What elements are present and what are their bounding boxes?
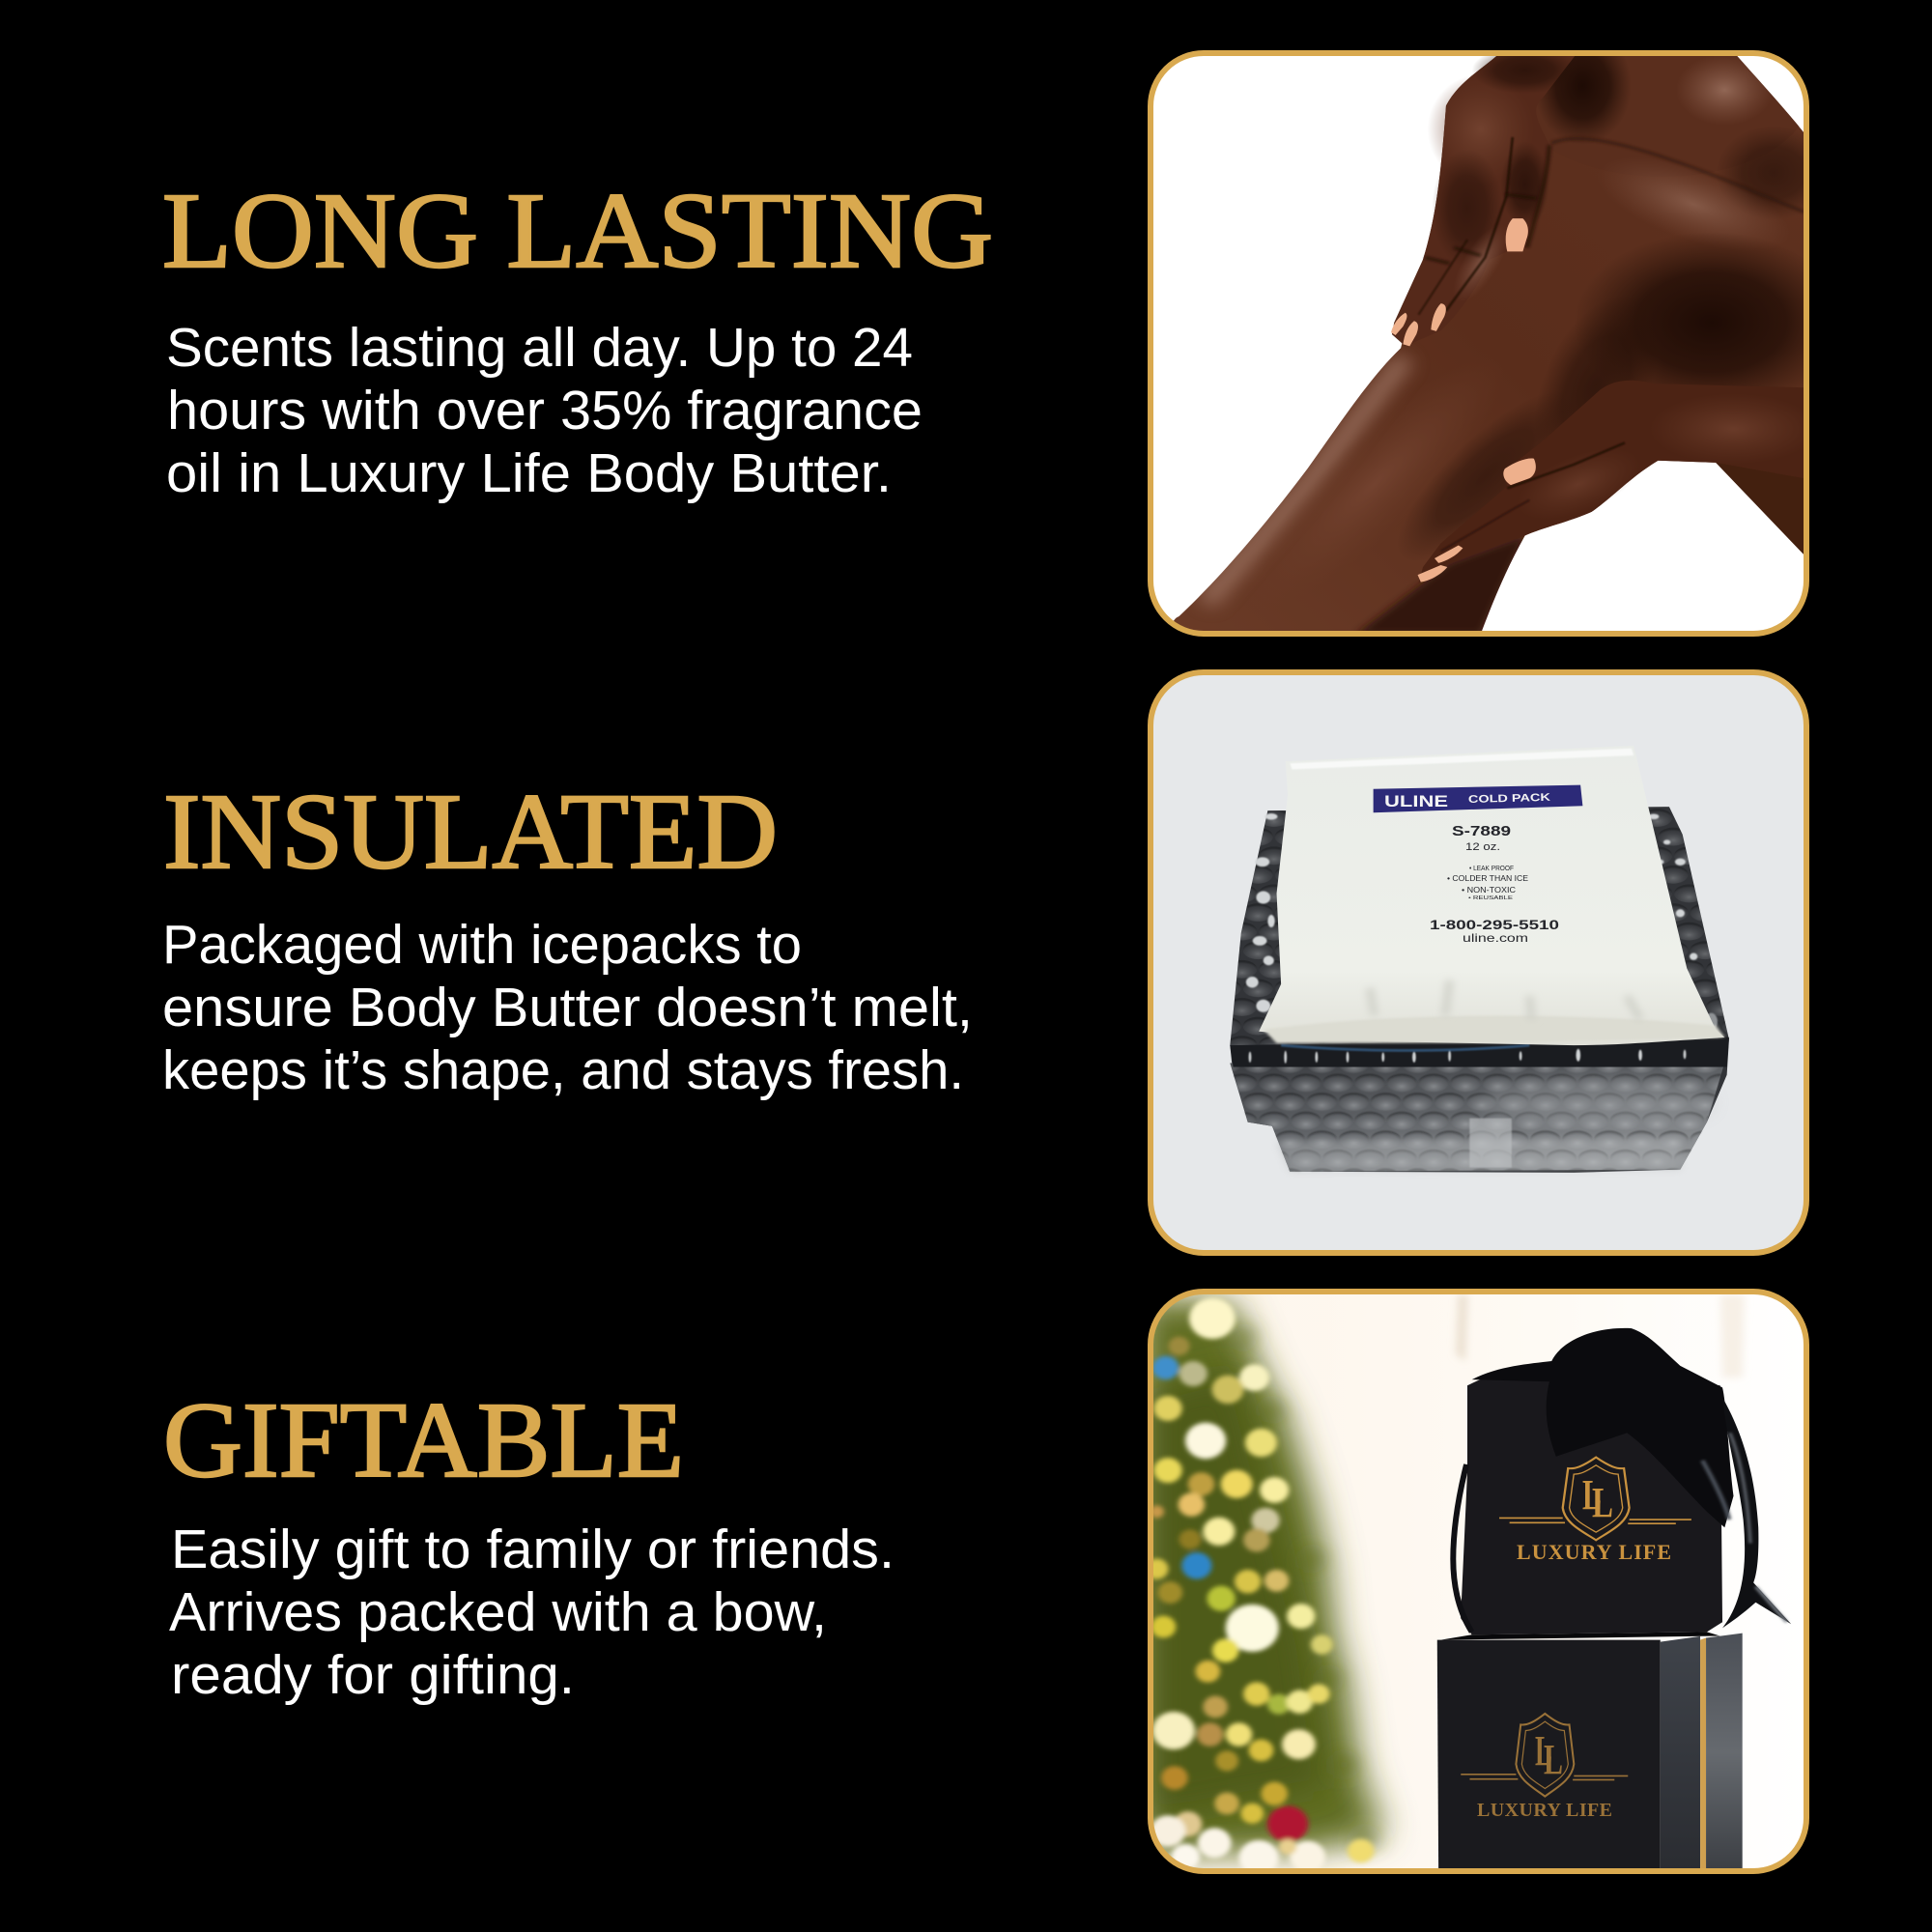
gold frame [1151,1292,1806,1871]
body text: insulated: ensure Body Butter doesn’t melt, [162,977,973,1038]
christmas tree foliage [1139,1298,1383,1855]
nails: upper hand [1391,218,1528,346]
lower hand and arm [1418,381,1818,582]
box branding text: L [1535,1727,1552,1775]
body text: long lasting [166,317,923,504]
box branding text: L [1592,1479,1613,1526]
illustration: christmas tree bokeh and gift boxes [1139,1294,1791,1876]
cold pack printed text: • NON-TOXIC [1462,886,1516,895]
body text: giftable: Easily gift to family or friends. [171,1519,895,1580]
cold pack printed text: • REUSABLE [1468,895,1513,901]
text block: giftable [163,1381,895,1706]
lower gift box [1437,1634,1743,1872]
text block: long lasting [162,172,993,504]
branch tips [1236,1326,1380,1847]
cold pack printed text: COLD PACK [1468,792,1550,806]
body text: insulated [162,914,973,1101]
logo crest: lower box [1461,1714,1628,1797]
panel: cold pack photo [1151,672,1806,1253]
box branding text: L [1544,1736,1563,1783]
panel: legs photo [1148,50,1809,637]
black ribbon bow [1453,1328,1791,1632]
blue-tinged rim highlights [1281,1045,1529,1050]
tree bokeh lights [1146,1298,1375,1876]
cold pack pouch [1259,807,1725,1045]
glints on the mailer walls [1246,813,1718,1064]
cold pack printed text: 1-800-295-5510 [1430,917,1559,932]
logo crest: upper bag [1499,1458,1691,1540]
cold pack printed text: S-7889 [1452,823,1511,839]
cold pack printed text: • LEAK PROOF [1469,864,1514,872]
heading: insulated: INSULATED [163,773,778,892]
body text: insulated: Packaged with icepacks to [162,914,802,976]
box branding text [1477,1471,1671,1821]
heading: long lasting: LONG LASTING [162,172,993,291]
box branding text: L [1582,1471,1602,1519]
box branding text: LUXURY LIFE [1517,1540,1671,1564]
panel: gift boxes photo [1139,1292,1806,1876]
box branding text: LUXURY LIFE [1477,1800,1612,1821]
illustration: moisturized legs and hands [1174,56,1804,631]
body text: giftable [169,1519,895,1706]
gold frame [1151,672,1806,1253]
body text: giftable: Arrives packed with a bow, [169,1581,827,1643]
cold pack printed text: 12 oz. [1465,841,1500,853]
gold frame [1151,53,1806,634]
text block: insulated [162,773,973,1101]
cold pack printed text [1384,792,1559,945]
body text: insulated: keeps it’s shape, and stays fresh. [162,1039,964,1101]
upper hand [1392,46,1578,346]
cold pack blue label [1374,785,1582,812]
body text: long lasting: oil in Luxury Life Body Butter. [166,442,892,504]
upper gift bag [1440,1364,1722,1640]
cold pack printed text: uline.com [1463,931,1528,945]
nails: lower hand [1418,459,1536,582]
cold pack printed text: • COLDER THAN ICE [1447,874,1528,883]
body text: giftable: ready for gifting. [171,1644,575,1706]
body text: long lasting: Scents lasting all day. Up to 24 [166,317,913,379]
heading: giftable: GIFTABLE [163,1381,684,1500]
cold pack printed text: ULINE [1384,792,1448,810]
body text: long lasting: hours with over 35% fragrance [167,380,923,441]
illustration: insulated bubble mailer [1230,746,1729,1173]
